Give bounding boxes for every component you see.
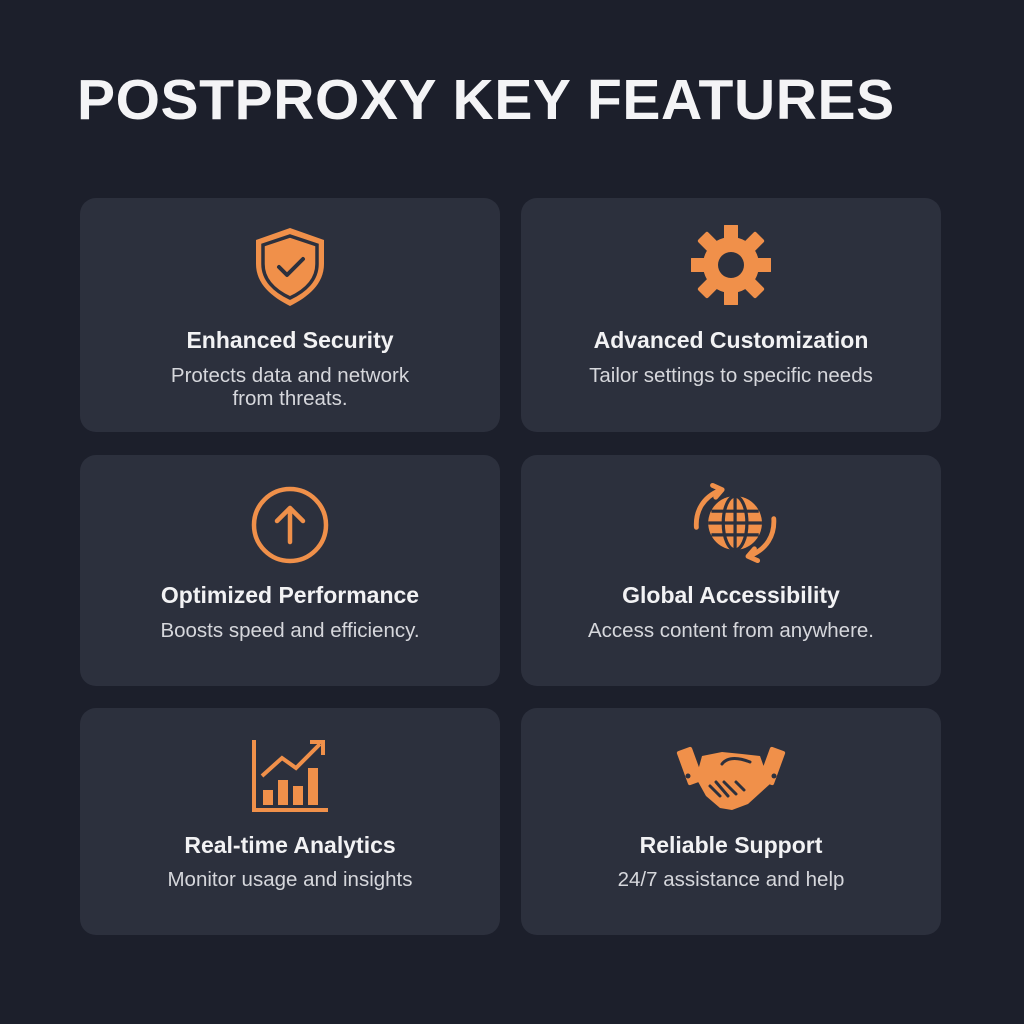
panel: optimized performance [80, 455, 500, 686]
icon: shield [256, 228, 324, 306]
panel: enhanced security [80, 198, 500, 432]
description: Monitor usage and insights [167, 868, 412, 891]
heading: Optimized Performance [161, 582, 419, 608]
heading: Real-time Analytics [184, 832, 396, 858]
description [171, 364, 410, 410]
title: POSTPROXY KEY FEATURES [77, 68, 895, 132]
description: Protects data and network [171, 364, 409, 387]
description: 24/7 assistance and help [618, 868, 844, 891]
heading: Reliable Support [640, 832, 822, 858]
description: Tailor settings to specific needs [589, 364, 873, 387]
icon: globe [694, 483, 776, 563]
panel: global accessibility [521, 455, 941, 686]
panel: advanced customization [521, 198, 941, 432]
panel: real-time analytics [80, 708, 500, 935]
icon: chart [252, 740, 328, 812]
icon: up arrow circle [252, 486, 328, 564]
panel: reliable support [521, 708, 941, 935]
heading: Enhanced Security [186, 327, 394, 353]
heading: Global Accessibility [622, 582, 840, 608]
description: Access content from anywhere. [588, 619, 874, 642]
icon: handshake [676, 746, 786, 810]
description: from threats. [232, 387, 348, 410]
description: Boosts speed and efficiency. [160, 619, 420, 642]
heading: Advanced Customization [594, 327, 868, 353]
icon: gear [691, 225, 771, 305]
